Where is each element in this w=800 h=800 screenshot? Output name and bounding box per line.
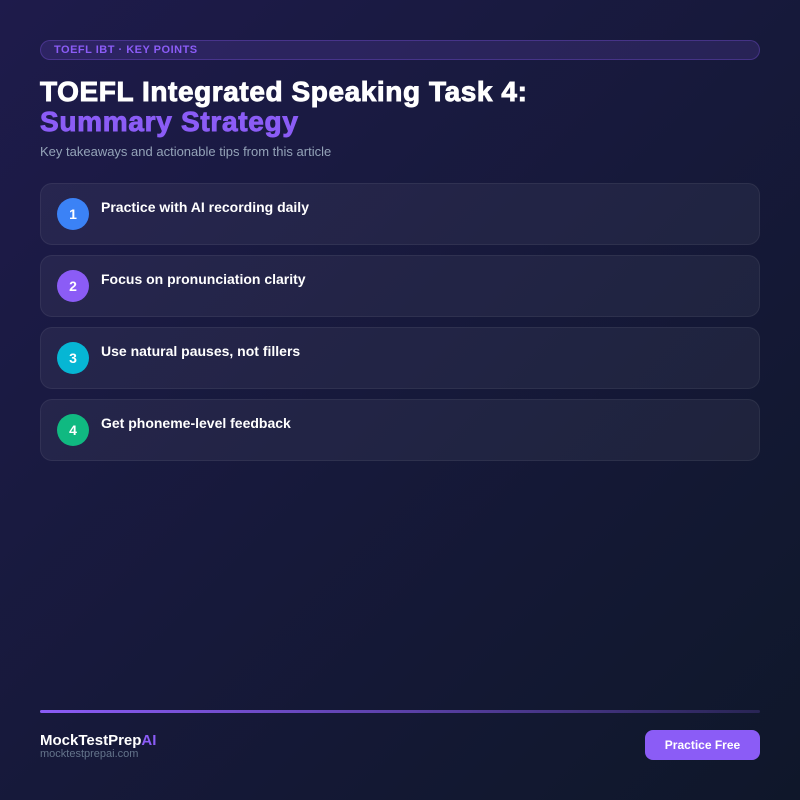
icon: number 4 <box>57 414 89 446</box>
panel: point 2 <box>40 255 760 317</box>
title: Summary Strategy <box>40 106 299 137</box>
subtitle: Key takeaways and actionable tips from this article <box>40 144 331 159</box>
button: practice free: Practice Free <box>665 738 740 752</box>
brand url: mocktestprepai.com <box>40 748 138 760</box>
badge <box>40 40 760 60</box>
footer rule <box>40 710 760 713</box>
button: practice free <box>645 730 760 760</box>
icon: number 3: 3 <box>69 350 77 366</box>
text: point 4: Get phoneme-level feedback <box>101 415 291 431</box>
title <box>40 76 527 138</box>
badge: TOEFL IBT · KEY POINTS <box>54 44 198 56</box>
icon: number 1 <box>57 198 89 230</box>
brand name: MockTestPrepAI <box>40 732 156 749</box>
text: point 3: Use natural pauses, not fillers <box>101 343 300 359</box>
icon: number 4: 4 <box>69 422 77 438</box>
panel: point 1 <box>40 183 760 245</box>
icon: number 2: 2 <box>69 278 77 294</box>
icon: number 2 <box>57 270 89 302</box>
panel: point 4 <box>40 399 760 461</box>
text: point 2: Focus on pronunciation clarity <box>101 271 306 287</box>
icon: number 1: 1 <box>69 206 77 222</box>
title: TOEFL Integrated Speaking Task 4: <box>40 76 527 107</box>
panel: point 3 <box>40 327 760 389</box>
icon: number 3 <box>57 342 89 374</box>
text: point 1: Practice with AI recording daily <box>101 199 309 215</box>
